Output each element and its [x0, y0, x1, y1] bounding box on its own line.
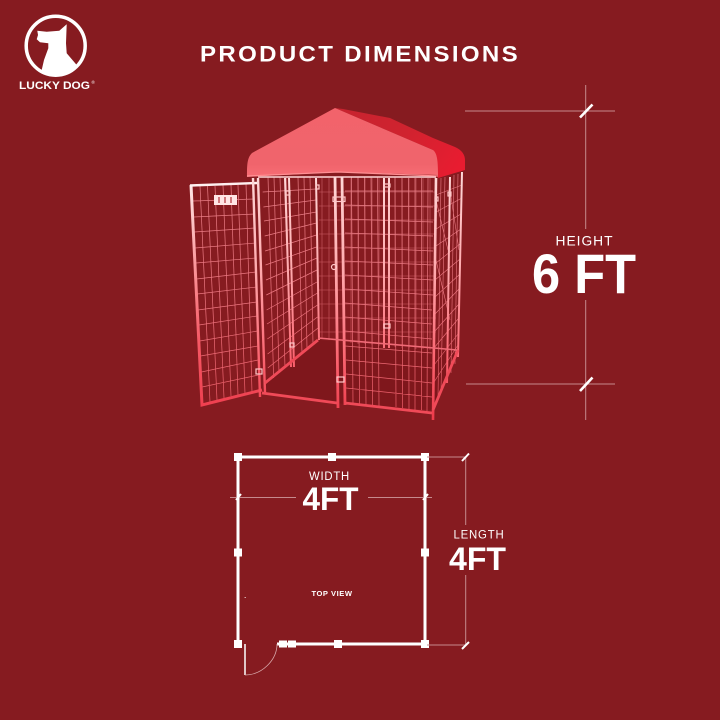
- door frame top: [190, 183, 257, 186]
- left side panel grid: [263, 177, 318, 378]
- width label: WIDTH: [309, 471, 350, 483]
- door tag: [214, 195, 237, 205]
- top rails: [258, 176, 436, 178]
- door swing: [244, 644, 246, 675]
- registered mark: ®: [92, 79, 96, 85]
- right side posts: [447, 172, 462, 383]
- top view label: TOP VIEW: [312, 591, 352, 598]
- front right panel grid: [345, 177, 433, 411]
- top view diagram: [230, 453, 506, 675]
- icon: dog silhouette: [36, 24, 76, 74]
- kennel illustration: [190, 108, 465, 420]
- width value: 4FT: [302, 481, 359, 517]
- title: PRODUCT DIMENSIONS: [200, 42, 520, 67]
- door hinge posts: [253, 178, 265, 397]
- back rail: [318, 338, 457, 350]
- bottom rails: [262, 340, 458, 413]
- kennel frame posts and rails: [190, 172, 462, 420]
- left panel mid posts: [285, 178, 294, 367]
- roof front panel: [247, 108, 438, 177]
- roof front edge: [247, 172, 438, 176]
- height dimension: [465, 85, 636, 420]
- back left post: [316, 178, 319, 340]
- front right mid posts: [384, 178, 389, 348]
- icon: logo ring: [26, 16, 85, 75]
- length ticks: [462, 454, 469, 649]
- wall connectors: [234, 453, 429, 648]
- length label: LENGTH: [454, 530, 504, 542]
- width ticks: [236, 494, 428, 500]
- small mark: [244, 596, 246, 599]
- length guide lines: [427, 457, 466, 645]
- length value: 4FT: [449, 541, 506, 577]
- height ticks: [580, 104, 592, 391]
- height value: 6 FT: [532, 242, 636, 305]
- logo wordmark: LUCKY DOG: [19, 80, 90, 92]
- height guide lines: [465, 85, 615, 420]
- right side panel grid: [434, 174, 462, 398]
- width guide lines: [230, 496, 432, 498]
- right corner post: [433, 178, 436, 420]
- door panel grid: [193, 184, 258, 402]
- door frame sides: [191, 185, 262, 405]
- front gate posts: [335, 177, 345, 408]
- roof side panel: [335, 108, 465, 178]
- back panel grid: [319, 178, 436, 350]
- door arc: [245, 644, 277, 675]
- height label: HEIGHT: [556, 232, 614, 248]
- kennel floor shadow: [262, 340, 457, 410]
- kennel outline: [238, 457, 425, 644]
- door tag marks: [219, 197, 231, 203]
- kennel brackets: [256, 184, 451, 382]
- logo: Lucky Dog: [19, 16, 96, 92]
